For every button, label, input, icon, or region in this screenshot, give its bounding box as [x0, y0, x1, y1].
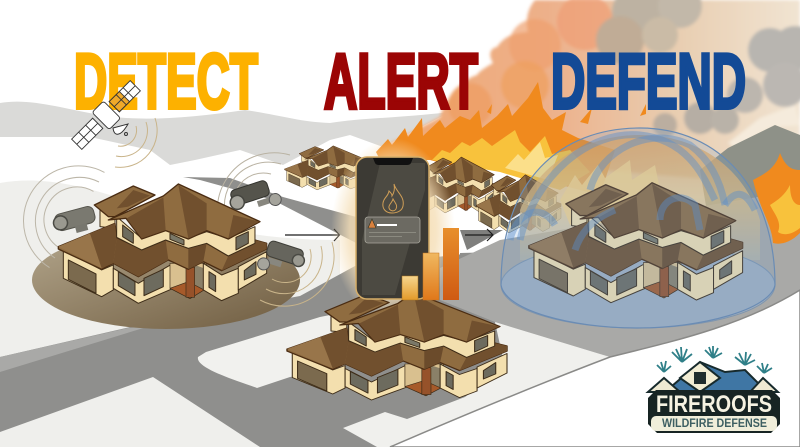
- icon: satellite: [68, 77, 157, 167]
- camera right: [256, 238, 307, 281]
- dome flame tips: [560, 160, 660, 225]
- dome background fire: [520, 135, 760, 260]
- logo: [648, 346, 780, 433]
- detect pad: [32, 231, 300, 329]
- house: back left: [285, 146, 369, 190]
- alert card: [365, 217, 420, 243]
- signal waves: camera top: [217, 153, 290, 249]
- camera left: [51, 205, 98, 238]
- main flames: [376, 82, 646, 195]
- camera top: [227, 177, 283, 219]
- bar chart: [402, 228, 459, 300]
- phone flame icon: [383, 184, 403, 213]
- house: behind dome: [477, 175, 561, 233]
- protective dome: [501, 128, 775, 328]
- arrow: detect to alert: [285, 229, 340, 241]
- logo window: [680, 362, 720, 392]
- logo sprinklers: [657, 346, 772, 373]
- heading: DETECT: DETECT: [74, 37, 258, 125]
- upper road to back house: [183, 177, 360, 245]
- road network: [0, 190, 800, 447]
- phone: [356, 157, 429, 299]
- arrow: alert to defend: [465, 229, 493, 241]
- warning icon: [368, 219, 376, 228]
- logo name: FIREROOFS: [656, 391, 772, 418]
- phone glow: [331, 138, 455, 322]
- logo gables: [648, 378, 680, 392]
- house: bottom foreground: [287, 293, 507, 400]
- signal waves: camera left: [23, 166, 105, 268]
- logo roof: [665, 362, 767, 392]
- hill band: [0, 102, 450, 165]
- dome floor: [501, 242, 775, 328]
- logo tagline: WILDFIRE DEFENSE: [662, 416, 767, 430]
- logo badge: [648, 390, 780, 433]
- heading: ALERT: ALERT: [324, 37, 478, 125]
- right hill: [700, 125, 800, 290]
- lower left terrain: [0, 181, 340, 447]
- main house: detect: [58, 184, 267, 303]
- smoke cloud: [378, 0, 800, 200]
- house: defend: [529, 183, 743, 303]
- house: back right: [413, 157, 497, 213]
- signal waves: camera right: [260, 242, 334, 306]
- right flame: [753, 153, 800, 244]
